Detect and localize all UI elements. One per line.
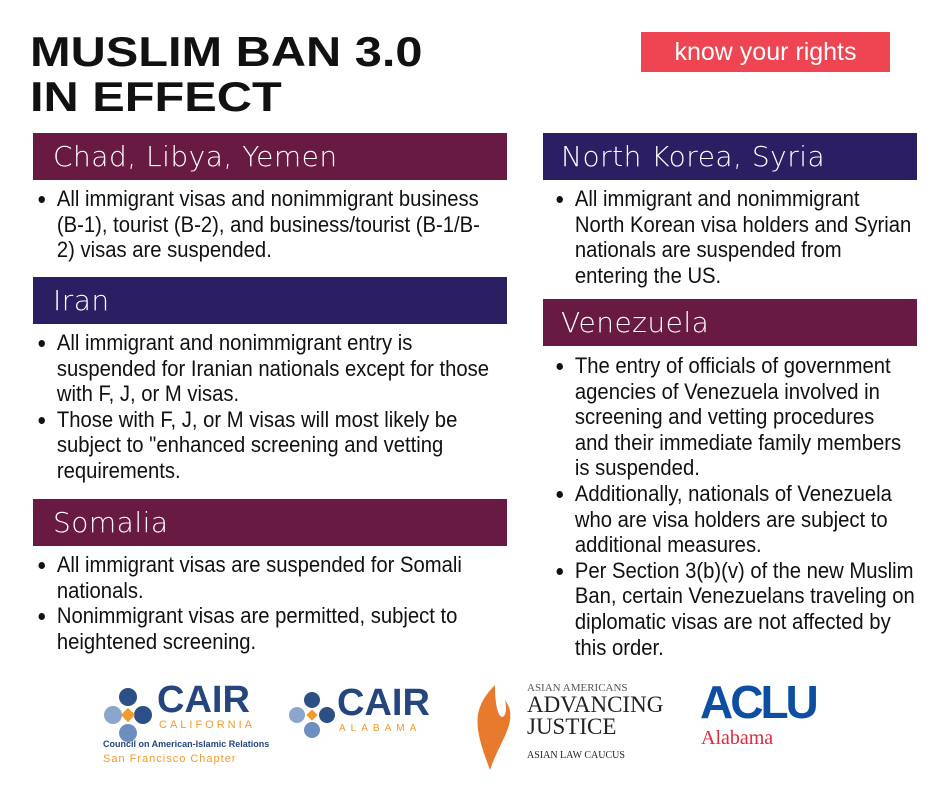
text: Iran [38, 330, 489, 483]
header: Venezuela: Venezuela [561, 306, 709, 339]
button: know your rights [641, 32, 890, 72]
text: Venezuela: additional measures. [575, 532, 762, 557]
title [30, 28, 422, 120]
logo: ACLU Alabama: Alabama [701, 727, 773, 749]
logo: Advancing Justice: JUSTICE [527, 714, 616, 739]
button: know your rights: know your rights [674, 38, 857, 66]
text: Somalia [38, 552, 462, 654]
text: Somalia: All immigrant visas are suspended for Somali [57, 552, 462, 577]
text: Venezuela: Per Section 3(b)(v) of the new Muslim [575, 558, 914, 583]
title: IN EFFECT [30, 73, 282, 120]
logo: CAIR California: San Francisco Chapter [103, 753, 236, 765]
text: Chad: 2) visas are suspended. [57, 237, 272, 262]
text: North Korea: All immigrant and nonimmigrant [575, 186, 860, 211]
text: Venezuela: Additionally, nationals of Venezuela [575, 481, 892, 506]
text: North Korea: entering the US. [575, 263, 721, 288]
text: Iran: requirements. [57, 458, 181, 483]
logo: CAIR Alabama: ALABAMA [339, 723, 421, 734]
logo: Advancing Justice: ASIAN AMERICANS [527, 682, 628, 694]
header: Venezuela [543, 299, 917, 346]
logo: CAIR Alabama [289, 682, 430, 738]
text: Venezuela: is suspended. [575, 455, 700, 480]
text: Venezuela: who are visa holders are subject to [575, 507, 888, 532]
logo: Advancing Justice [478, 682, 663, 770]
header: Somalia [33, 499, 507, 546]
logo: ACLU Alabama: ACLU [700, 676, 816, 728]
text: Venezuela: Ban, certain Venezuelans traveling on [575, 583, 915, 608]
text: Venezuela: diplomatic visas are not affected by [575, 609, 891, 634]
title: MUSLIM BAN 3.0 [30, 28, 422, 75]
text: Chad: All immigrant visas and nonimmigrant business [57, 186, 479, 211]
text: Iran: subject to "enhanced screening and vetting [57, 432, 443, 457]
header: Chad, Libya, Yemen: Chad, Libya, Yemen [53, 140, 338, 173]
text: Venezuela [556, 353, 915, 660]
header: Somalia: Somalia [53, 506, 169, 539]
logo: CAIR California: Council on American-Islamic Relations [103, 739, 269, 749]
text: Somalia: heightened screening. [57, 629, 256, 654]
text: Chad [38, 186, 480, 262]
text: North Korea [556, 186, 911, 288]
text: Somalia: Nonimmigrant visas are permitted, subject to [57, 603, 457, 628]
header: Chad, Libya, Yemen [33, 133, 507, 180]
logo: CAIR California: CAIR [157, 679, 250, 721]
logo: CAIR Alabama: CAIR [337, 682, 430, 724]
logo: Advancing Justice: ASIAN LAW CAUCUS [527, 750, 625, 761]
text: Venezuela: and their immediate family members [575, 430, 901, 455]
text: Chad: (B-1), tourist (B-2), and business/tourist (B-1/B- [57, 212, 480, 237]
text: Venezuela: this order. [575, 635, 664, 660]
text: Iran: Those with F, J, or M visas will most likely be [57, 407, 457, 432]
text: North Korea: nationals are suspended from [575, 237, 842, 262]
text: Somalia: nationals. [57, 578, 144, 603]
header: North Korea, Syria [543, 133, 917, 180]
text: Iran: suspended for Iranian nationals except for those [57, 356, 489, 381]
text: Venezuela: The entry of officials of government [575, 353, 891, 378]
logos [103, 676, 816, 770]
text: North Korea: North Korean visa holders and Syrian [575, 212, 911, 237]
header: Iran: Iran [53, 284, 110, 317]
text: Iran: All immigrant and nonimmigrant entry is [57, 330, 412, 355]
logo: CAIR California [103, 679, 269, 765]
header: North Korea, Syria: North Korea, Syria [561, 140, 825, 173]
text: Venezuela: screening and vetting procedures [575, 404, 874, 429]
text: Venezuela: agencies of Venezuela involved in [575, 379, 880, 404]
logo: CAIR California: CALIFORNIA [159, 719, 255, 731]
text: Iran: with F, J, or M visas. [57, 381, 239, 406]
logo: Advancing Justice: ADVANCING [527, 692, 663, 717]
header: Iran [33, 277, 507, 324]
